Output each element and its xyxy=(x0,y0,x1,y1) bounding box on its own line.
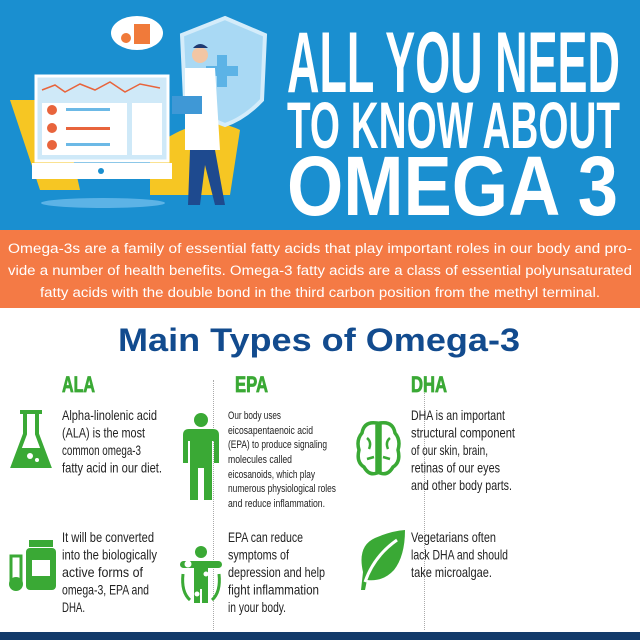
intro band: Omega-3s are a family of essential fatty acids that play important roles in our body and pro- xyxy=(8,241,632,256)
column: EPA: symptoms of xyxy=(228,546,289,562)
text EPA: numerous physiological roles xyxy=(228,483,336,495)
text EPA: Our body uses xyxy=(228,410,281,422)
section heading: Main Types of Omega-3 xyxy=(118,322,520,358)
icon: body with joints xyxy=(180,546,222,603)
illustration: doctor with monitor xyxy=(10,16,268,208)
column: EPA: in your body. xyxy=(228,599,286,615)
title xyxy=(287,15,620,230)
text ALA: (ALA) is the most xyxy=(62,424,145,440)
bottom bar xyxy=(0,632,640,640)
text DHA xyxy=(411,407,515,580)
text EPA: eicosapentaenoic acid xyxy=(228,425,313,437)
column: DHA xyxy=(356,372,515,590)
text EPA xyxy=(228,410,336,510)
text DHA: structural component xyxy=(411,424,515,440)
text EPA: and reduce inflammation. xyxy=(228,498,325,510)
text EPA: (EPA) to produce signaling xyxy=(228,439,327,451)
intro band xyxy=(0,230,640,308)
text ALA: fatty acid in our diet. xyxy=(62,460,162,476)
text ALA: It will be converted xyxy=(62,529,154,545)
icon: person xyxy=(183,413,219,500)
text DHA: of our skin, brain, xyxy=(411,442,488,458)
intro band: vide a number of health benefits. Omega-3 fatty acids are a class of essential polyunsaturated xyxy=(8,263,632,278)
icon: leaf xyxy=(361,530,405,590)
column: ALA xyxy=(9,372,162,615)
text ALA: into the biologically xyxy=(62,546,157,562)
column: EPA: fight inflammation xyxy=(228,582,319,598)
icon: supplements xyxy=(9,540,56,591)
text DHA: take microalgae. xyxy=(411,564,492,580)
column: EPA: depression and help xyxy=(228,564,325,580)
column: EPA xyxy=(180,372,336,615)
icon: brain xyxy=(358,423,399,474)
text ALA: Alpha-linolenic acid xyxy=(62,407,157,423)
text ALA: DHA. xyxy=(62,599,85,615)
text DHA: and other body parts. xyxy=(411,477,512,493)
text EPA: eicosanoids, which play xyxy=(228,469,315,481)
text DHA: retinas of our eyes xyxy=(411,460,500,476)
heading ALA: ALA xyxy=(62,372,95,397)
text ALA: common omega-3 xyxy=(62,442,141,458)
text DHA: DHA is an important xyxy=(411,407,505,423)
header panel xyxy=(0,0,640,230)
text EPA: molecules called xyxy=(228,454,292,466)
intro band: fatty acids with the double bond in the third carbon position from the methyl terminal. xyxy=(40,285,600,300)
column: EPA: EPA can reduce xyxy=(228,529,303,545)
text ALA xyxy=(62,407,162,615)
text DHA: Vegetarians often xyxy=(411,529,496,545)
text DHA: lack DHA and should xyxy=(411,546,508,562)
icon: flask xyxy=(13,410,49,466)
text ALA: omega-3, EPA and xyxy=(62,582,149,598)
heading DHA: DHA xyxy=(411,372,447,397)
heading EPA: EPA xyxy=(235,372,268,397)
dividers xyxy=(213,380,214,630)
text ALA: active forms of xyxy=(62,564,143,580)
